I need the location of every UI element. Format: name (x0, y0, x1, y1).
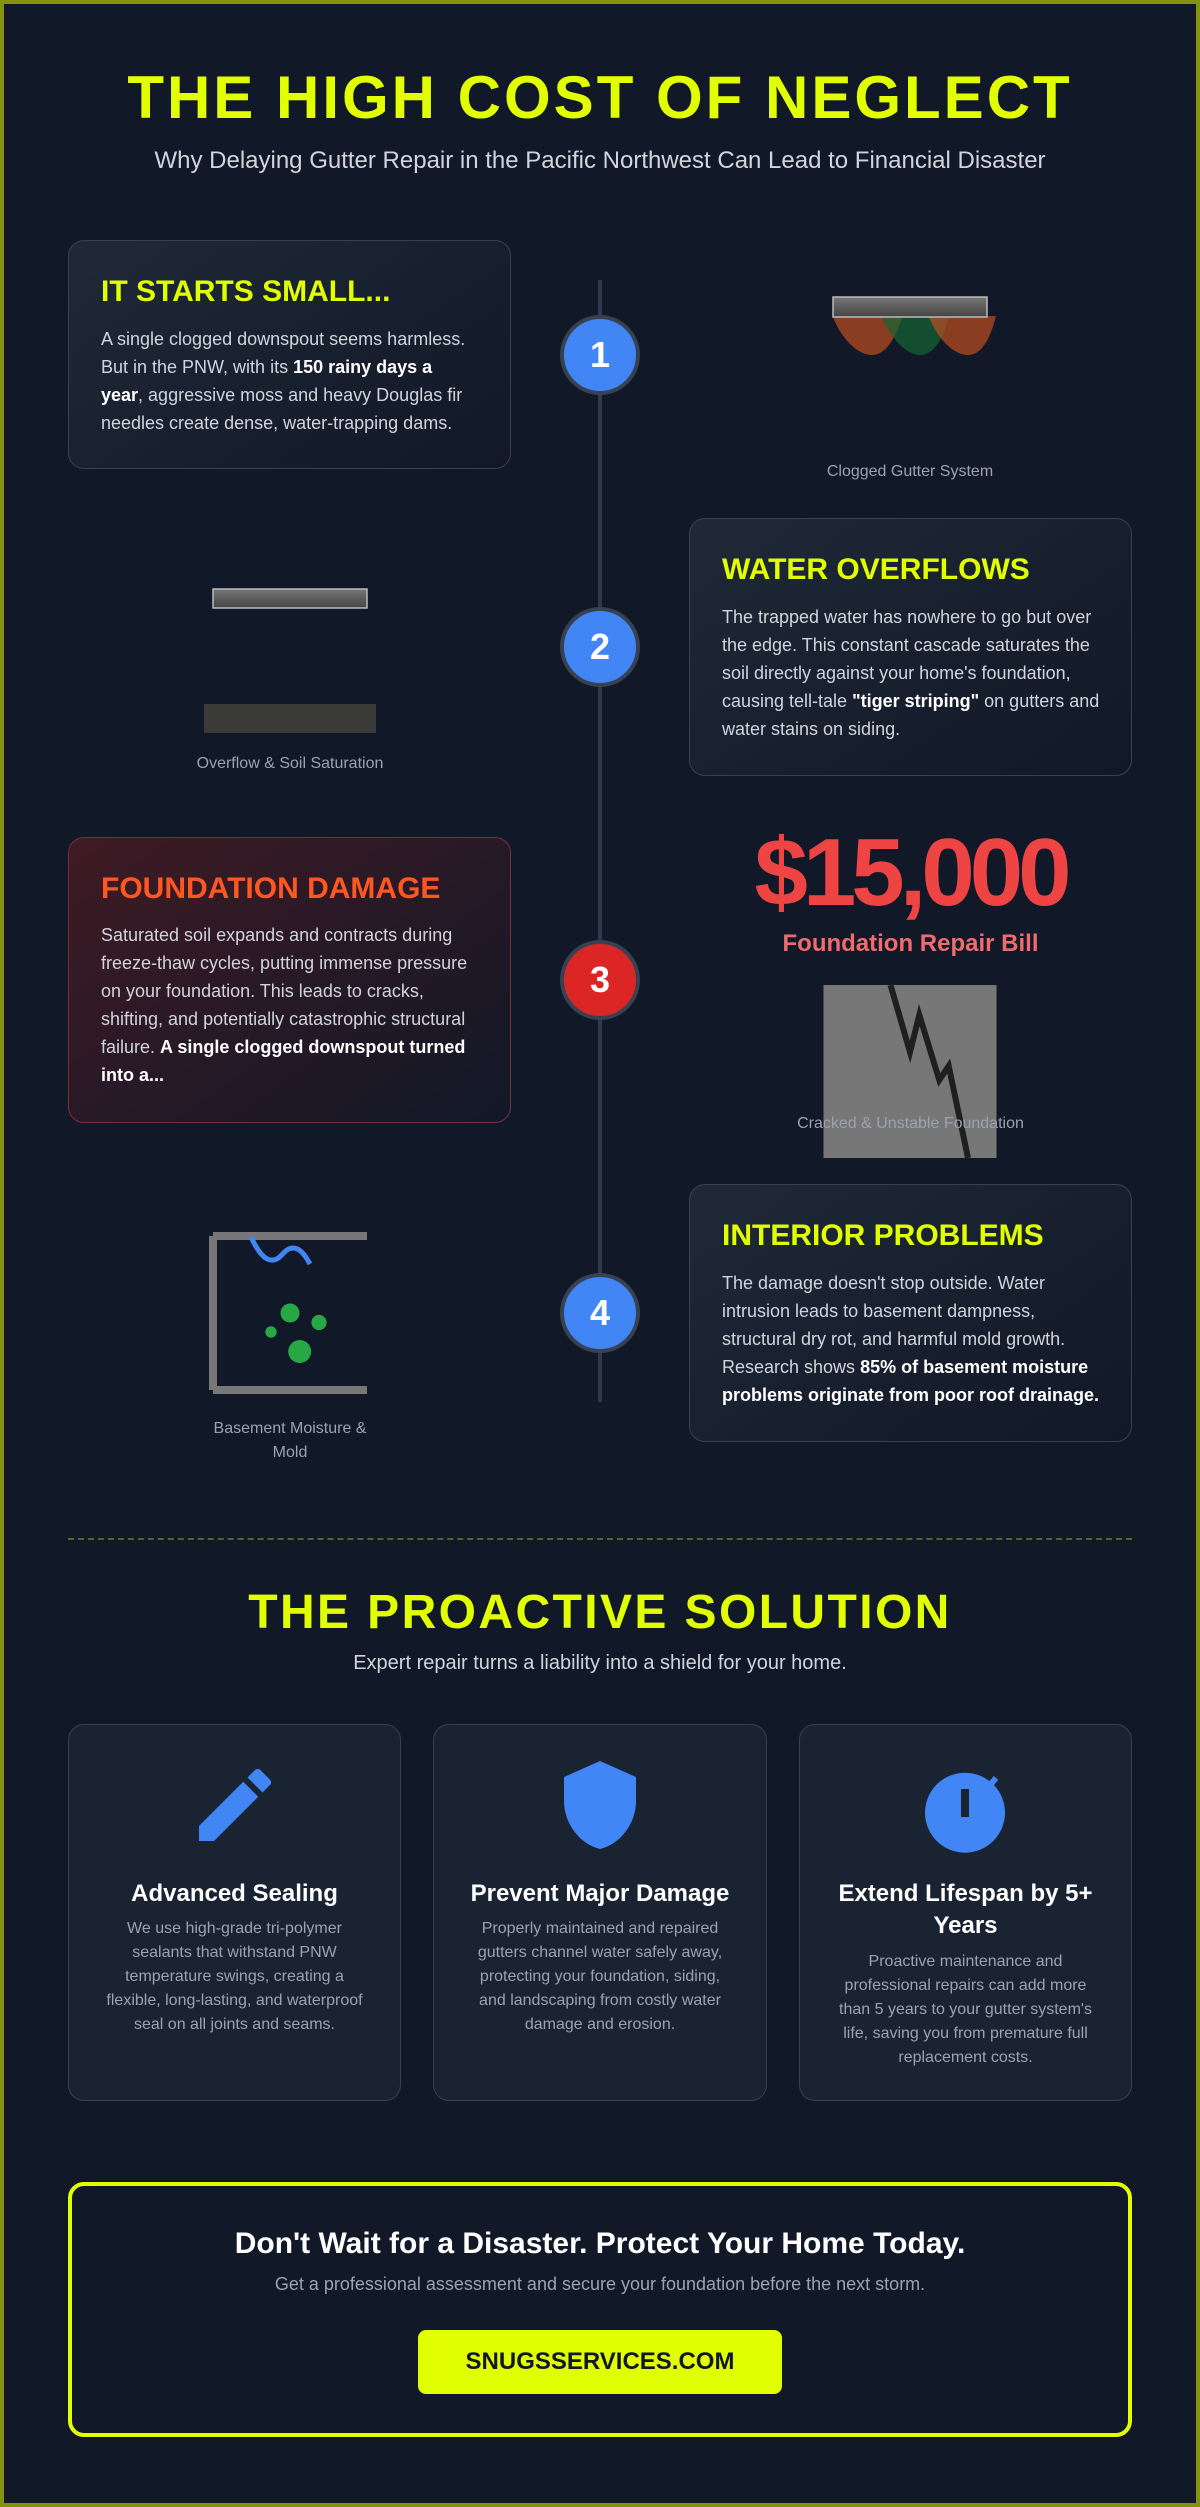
icon: timer (925, 1772, 1005, 1853)
panel: interior problems (689, 1184, 1132, 1442)
panel: water overflows: WATER OVERFLOWS (722, 553, 1030, 586)
panel: it starts small: A single clogged downspout seems harmless. But in the PNW, with its 150 rainy days a year, aggressive moss and heavy Douglas fir needles create dense, water-trapping dams. (101, 329, 465, 433)
step number 2: 2 (590, 626, 610, 667)
panel: water overflows (689, 518, 1132, 776)
caption: clogged gutter: Clogged Gutter System (827, 463, 993, 480)
panel: interior problems: INTERIOR PROBLEMS (722, 1219, 1044, 1252)
section divider (68, 1538, 1132, 1540)
icon: shield (564, 1761, 636, 1849)
caption: basement moisture: Basement Moisture & (214, 1420, 366, 1437)
cost label: Foundation Repair Bill (782, 930, 1038, 957)
damage heading: Prevent Major Damage (471, 1880, 729, 1907)
sealing text: We use high-grade tri-polymer sealants that withstand PNW temperature swings, creating a flexible, long-lasting, and waterproof seal on all joints and seams. (106, 1920, 363, 2033)
icon: pencil (199, 1769, 271, 1841)
panel: advanced sealing (68, 1724, 401, 2101)
step number 1 (560, 315, 640, 395)
lifespan text: Proactive maintenance and professional repairs can add more than 5 years to your gutter system's life, saving you from premature full replacement costs. (839, 1953, 1092, 2066)
subtitle: Why Delaying Gutter Repair in the Pacific Northwest Can Lead to Financial Disaster (154, 147, 1046, 174)
caption: basement moisture: Mold (273, 1444, 307, 1461)
panel: call to action (68, 2182, 1132, 2437)
illustration: basement moisture and mold (209, 1232, 367, 1394)
timeline line (598, 280, 602, 1402)
solution subtitle: Expert repair turns a liability into a shield for your home. (353, 1652, 847, 1674)
big cost figure: $15,000 (754, 819, 1066, 926)
sealing heading: Advanced Sealing (131, 1880, 338, 1907)
damage text: Properly maintained and repaired gutters channel water safely away, protecting your foundation, siding, and landscaping from costly water damage and erosion. (478, 1920, 722, 2033)
caption: overflow: Overflow & Soil Saturation (197, 755, 383, 772)
cta heading: Don't Wait for a Disaster. Protect Your Home Today. (235, 2227, 965, 2260)
title: THE HIGH COST OF NEGLECT (127, 64, 1073, 131)
step number 4 (560, 1273, 640, 1353)
illustration: clogged gutter (832, 296, 996, 355)
illustration: cracked foundation (824, 985, 996, 1158)
cta text: Get a professional assessment and secure your foundation before the next storm. (275, 2274, 925, 2294)
panel: water overflows: The trapped water has nowhere to go but over the edge. This constant cascade saturates the soil directly against your home's foundation, causing tell-tale "tiger striping" on gutters and water stains on siding. (722, 607, 1099, 739)
panel: foundation damage: Saturated soil expands and contracts during freeze-thaw cycles, putting immense pressure on your foundation. This leads to cracks, shifting, and potentially catastrophic structural failure. A single clogged downspout turned into a... (101, 925, 467, 1085)
cta button: SNUGSSERVICES.COM (466, 2348, 734, 2375)
heading: proactive solution: THE PROACTIVE SOLUTION (248, 1586, 952, 1639)
cta button (418, 2330, 782, 2394)
step number 4: 4 (590, 1292, 610, 1333)
step number 3 (560, 940, 640, 1020)
step number 2 (560, 607, 640, 687)
caption: basement moisture (214, 1420, 366, 1461)
panel: it starts small (68, 240, 511, 469)
illustration: overflow and soil (204, 588, 376, 733)
panel: interior problems: The damage doesn't stop outside. Water intrusion leads to basement dampness, structural dry rot, and harmful mold growth. Research shows 85% of basement moisture problems originate from poor roof drainage. (722, 1273, 1099, 1405)
panel: extend lifespan (799, 1724, 1132, 2101)
caption: cracked foundation: Cracked & Unstable Foundation (797, 1115, 1024, 1132)
step number 1: 1 (590, 334, 610, 375)
panel: it starts small: IT STARTS SMALL... (101, 275, 390, 308)
panel: prevent major damage (433, 1724, 767, 2101)
step number 3: 3 (590, 959, 610, 1000)
panel: foundation damage: FOUNDATION DAMAGE (101, 872, 440, 905)
panel: foundation damage (68, 837, 511, 1123)
lifespan heading: Extend Lifespan by 5+ Years (838, 1880, 1093, 1939)
